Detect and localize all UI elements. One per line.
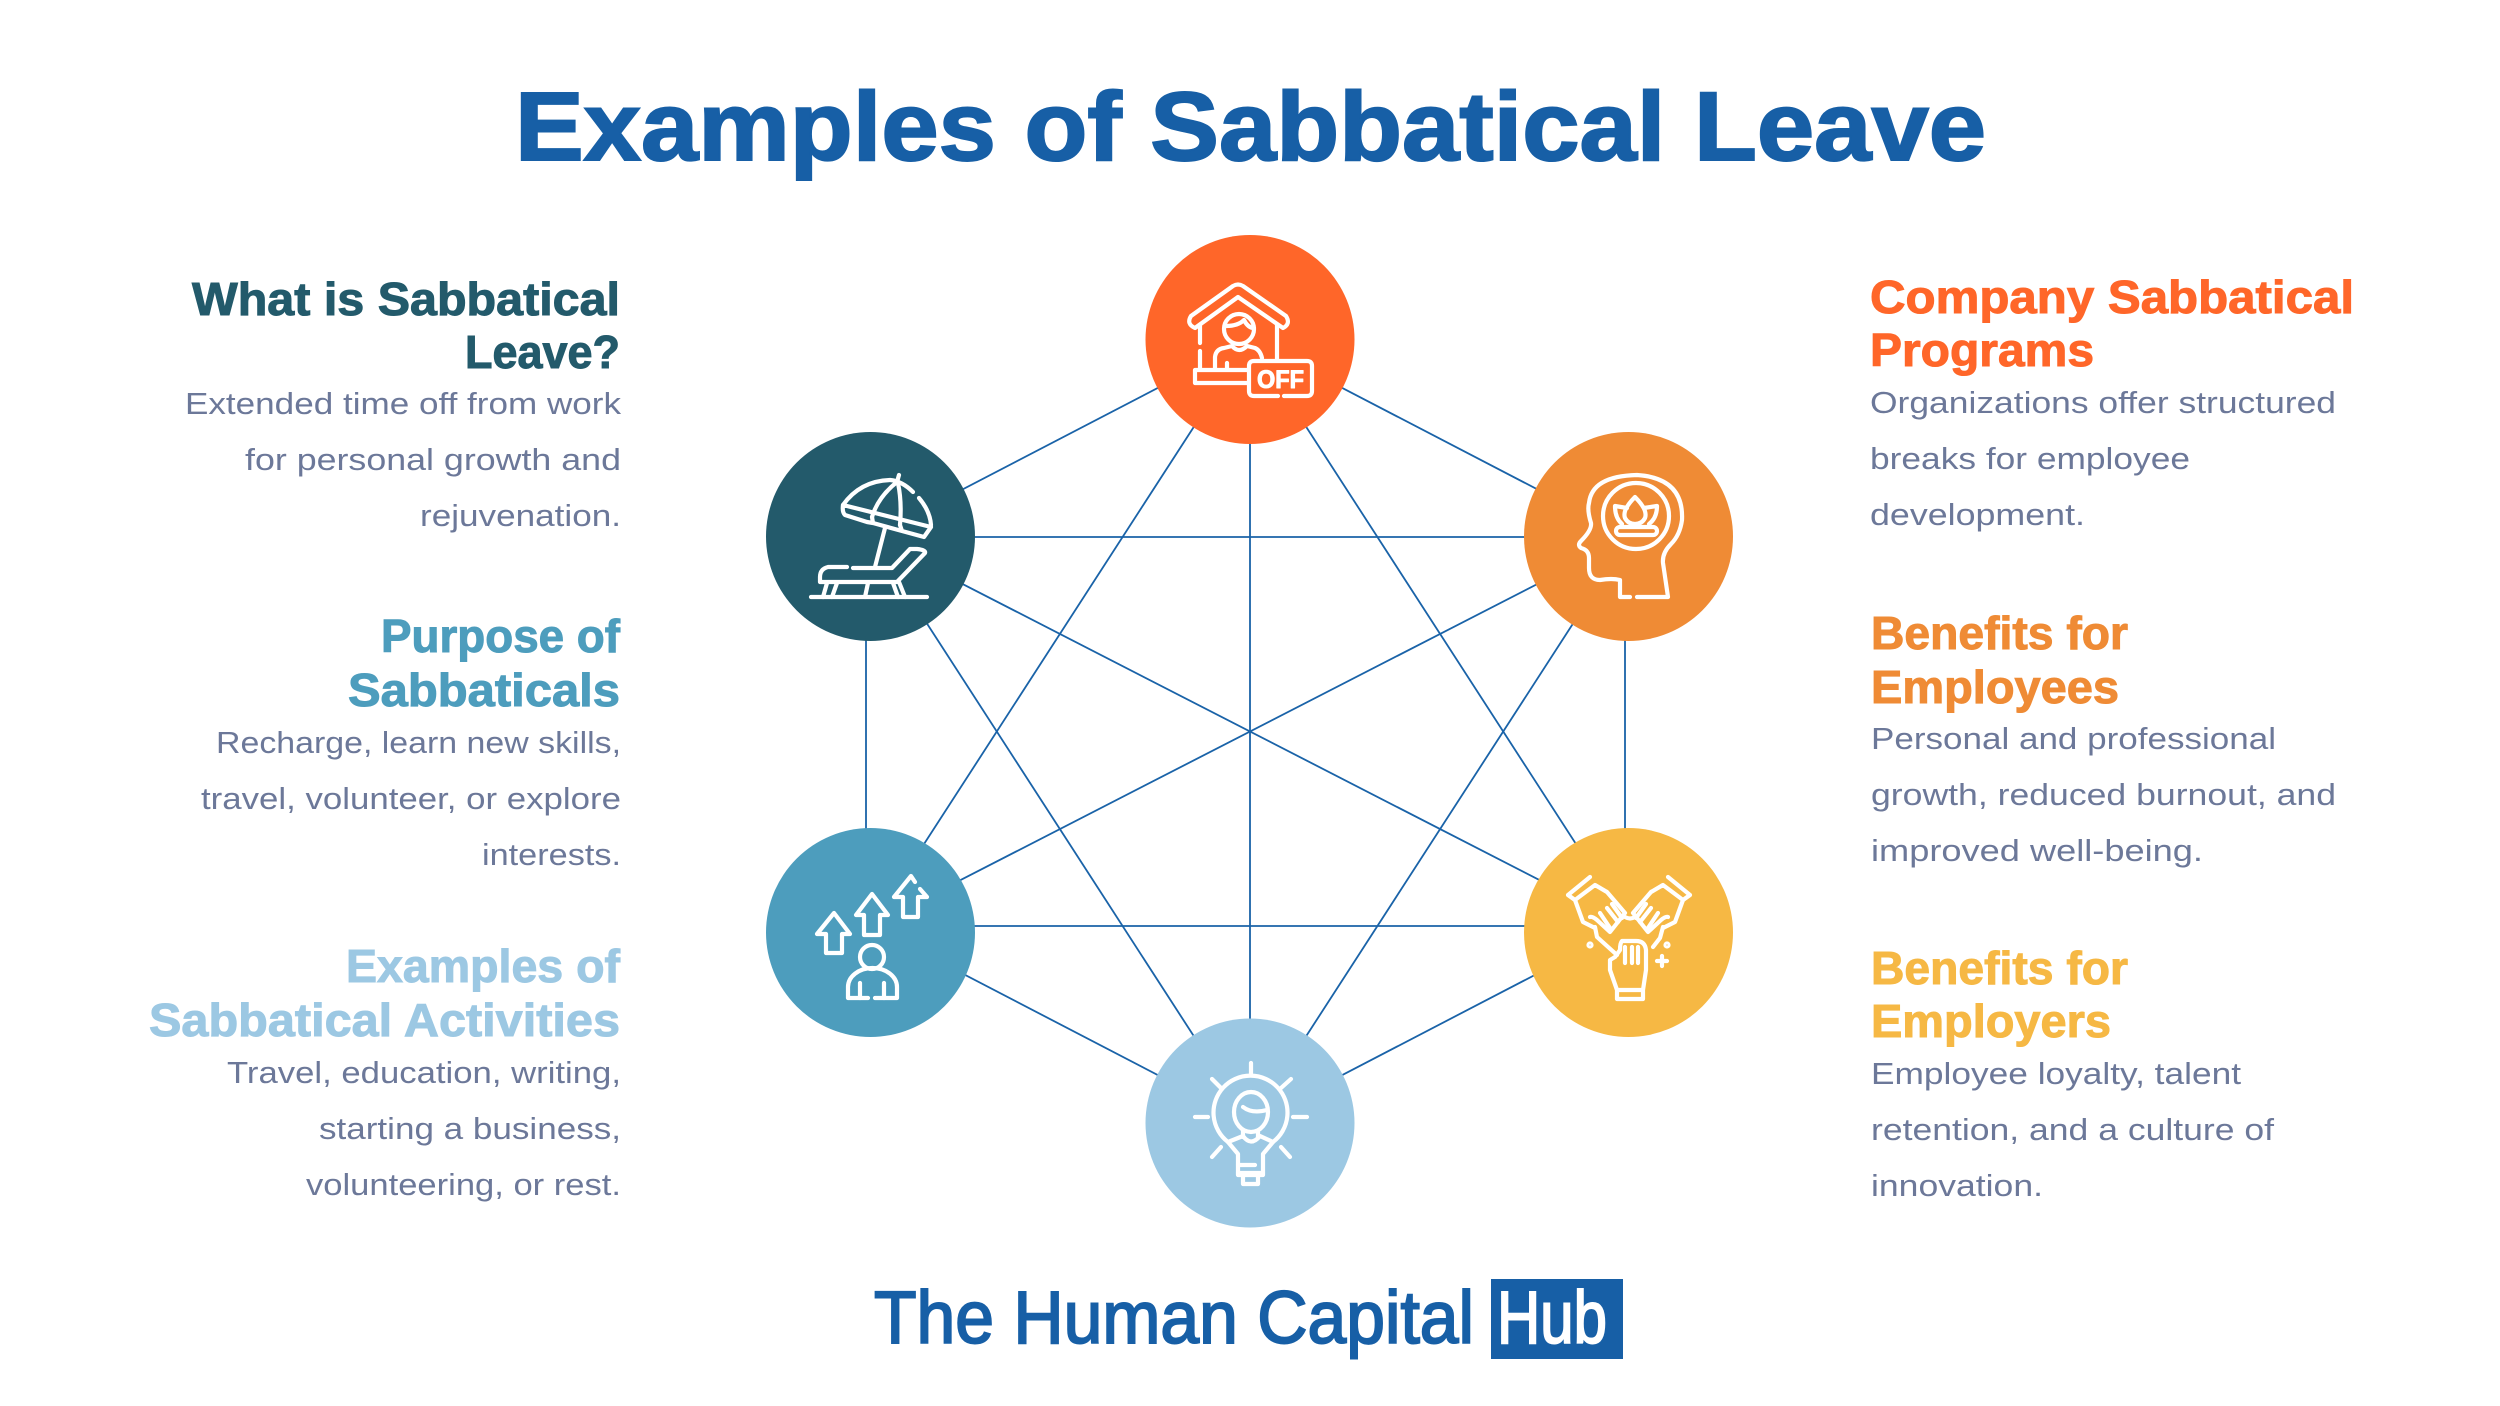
title: Examples of Sabbatical Leave: [515, 72, 1986, 181]
body: What is Sabbatical Leave: [185, 386, 622, 533]
heading: Company Sabbatical Programs: Company Sabbatical: [1870, 271, 2354, 323]
heading: Company Sabbatical Programs: Programs: [1870, 324, 2094, 376]
body: Examples of Sabbatical Activities: starting a business,: [319, 1111, 621, 1146]
heading: Benefits for Employees: [1871, 607, 2128, 713]
text block: Company Sabbatical Programs: [1870, 271, 2354, 532]
body: Purpose of Sabbaticals: Recharge, learn new skills,: [216, 725, 621, 760]
body: Benefits for Employees: growth, reduced burnout, and: [1871, 777, 2336, 812]
heading: Purpose of Sabbaticals: Sabbaticals: [348, 664, 620, 716]
body: Benefits for Employers: Employee loyalty, talent: [1871, 1056, 2241, 1091]
text block: Examples of Sabbatical Activities: [149, 940, 621, 1202]
heading: What is Sabbatical Leave: [192, 273, 620, 378]
heading: Benefits for Employers: Benefits for: [1871, 942, 2128, 994]
logo: The Human Capital Hub: The Human Capital: [874, 1276, 1474, 1359]
icon: umbrella and lounger: [811, 475, 931, 597]
node: benefits for employees (head with lotus icon): [1524, 432, 1733, 641]
node: benefits for employers (joined hands icon): [1524, 828, 1733, 1037]
body: Company Sabbatical Programs: development.: [1870, 497, 2085, 532]
heading: Benefits for Employers: Employers: [1871, 995, 2111, 1047]
node: what is sabbatical (beach umbrella icon): [766, 432, 975, 641]
heading: What is Sabbatical Leave: What is Sabbatical: [192, 273, 620, 325]
text block: Purpose of Sabbaticals: [201, 610, 621, 872]
heading: Purpose of Sabbaticals: [348, 610, 621, 716]
heading: What is Sabbatical Leave: Leave?: [465, 326, 620, 378]
heading: Benefits for Employees: Benefits for: [1871, 607, 2128, 659]
heading: Examples of Sabbatical Activities: Examples of: [346, 940, 621, 992]
body: What is Sabbatical Leave: rejuvenation.: [420, 498, 621, 533]
icon: three joined hands: [1568, 877, 1690, 999]
heading: Company Sabbatical Programs: [1870, 271, 2354, 376]
heading: Benefits for Employees: Employees: [1871, 661, 2119, 713]
body: Benefits for Employees: [1871, 721, 2336, 868]
body: Company Sabbatical Programs: [1870, 385, 2336, 532]
body: Company Sabbatical Programs: breaks for employee: [1870, 441, 2190, 476]
body: Benefits for Employees: improved well-being.: [1871, 833, 2203, 868]
text block: Benefits for Employers: [1871, 942, 2274, 1203]
icon: head with lotus: [1579, 475, 1682, 597]
text block: What is Sabbatical Leave: [185, 273, 622, 533]
body: Examples of Sabbatical Activities: [227, 1055, 621, 1202]
body: Benefits for Employers: innovation.: [1871, 1168, 2043, 1203]
node: purpose (person with rising arrows icon): [766, 828, 975, 1037]
body: What is Sabbatical Leave: Extended time off from work: [185, 386, 622, 421]
icon: person in house with OFF sign: OFF: [1257, 366, 1304, 394]
body: Purpose of Sabbaticals: interests.: [482, 837, 621, 872]
heading: Benefits for Employers: [1871, 942, 2128, 1047]
body: Purpose of Sabbaticals: [201, 725, 621, 872]
heading: Examples of Sabbatical Activities: Sabbatical Activities: [149, 994, 620, 1046]
heading: Examples of Sabbatical Activities: [149, 940, 621, 1046]
icon: person with three arrows: [817, 876, 927, 998]
body: Company Sabbatical Programs: Organizations offer structured: [1870, 385, 2336, 420]
body: What is Sabbatical Leave: for personal growth and: [245, 442, 621, 477]
text block: Benefits for Employees: [1871, 607, 2336, 868]
icon: light bulb with person: [1195, 1063, 1307, 1184]
icon: person in house with OFF sign: [1189, 284, 1312, 396]
node: company programs (top, OFF house icon): [1146, 235, 1354, 444]
body: Benefits for Employees: Personal and professional: [1871, 721, 2276, 756]
body: Examples of Sabbatical Activities: volunteering, or rest.: [306, 1167, 621, 1202]
body: Benefits for Employers: [1871, 1056, 2274, 1203]
network lines connecting all six circles: [866, 340, 1629, 1123]
logo: The Human Capital Hub: Hub: [1497, 1276, 1607, 1359]
body: Benefits for Employers: retention, and a culture of: [1871, 1112, 2274, 1147]
body: Examples of Sabbatical Activities: Travel, education, writing,: [227, 1055, 621, 1090]
node: examples of activities (bulb with person icon): [1146, 1018, 1354, 1228]
body: Purpose of Sabbaticals: travel, volunteer, or explore: [201, 781, 621, 816]
heading: Purpose of Sabbaticals: Purpose of: [381, 610, 621, 662]
